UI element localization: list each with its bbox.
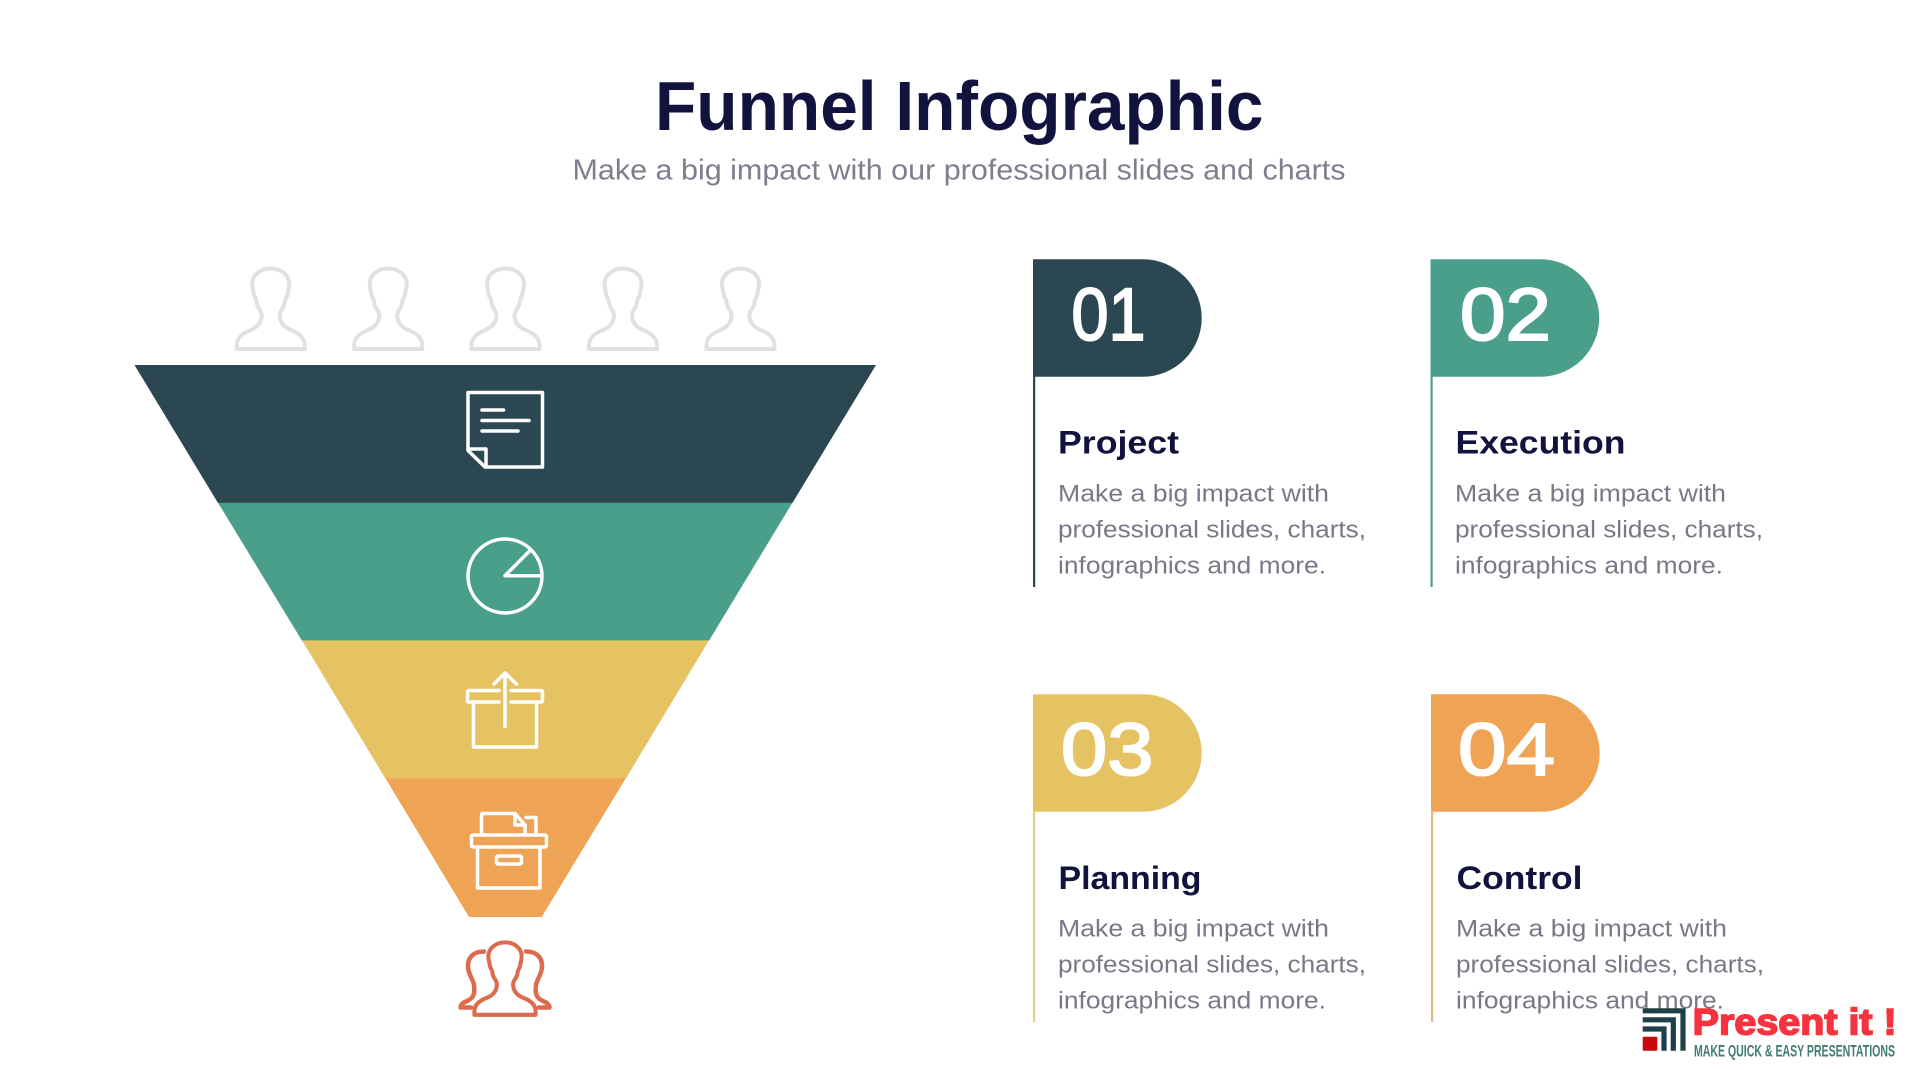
description: Make a big impact with bbox=[1456, 915, 1727, 942]
funnel chart bbox=[134, 365, 876, 917]
description: infographics and more. bbox=[1058, 987, 1326, 1014]
description: professional slides, charts, bbox=[1456, 951, 1764, 978]
description bbox=[1455, 480, 1763, 580]
number 02: 02 bbox=[1460, 273, 1551, 356]
description: Make a big impact with bbox=[1058, 480, 1329, 508]
description: infographics and more. bbox=[1058, 552, 1326, 580]
icon row: five grey people bbox=[237, 268, 774, 349]
icon: pie chart bbox=[468, 539, 542, 613]
panel: 02 Execution bbox=[1430, 259, 1763, 587]
number 03: 03 bbox=[1061, 708, 1154, 791]
accent line bbox=[1431, 811, 1433, 1022]
heading: Control bbox=[1456, 860, 1582, 896]
funnel layer 1 bbox=[134, 365, 876, 503]
number badge 01 bbox=[1033, 259, 1202, 377]
description: infographics and more. bbox=[1456, 987, 1724, 1014]
description bbox=[1058, 915, 1366, 1014]
funnel layer 4 bbox=[386, 778, 626, 917]
logo wordmark: Present it ! bbox=[1693, 1002, 1897, 1042]
title: Funnel Infographic bbox=[655, 67, 1264, 145]
icon: group of people bbox=[460, 942, 550, 1015]
panel: 03 Planning bbox=[1033, 694, 1366, 1022]
number badge 04 bbox=[1431, 694, 1600, 812]
description: professional slides, charts, bbox=[1058, 951, 1366, 978]
description: professional slides, charts, bbox=[1455, 516, 1763, 544]
icon: box with upward arrow bbox=[468, 673, 542, 747]
subtitle: Make a big impact with our professional slides and charts bbox=[572, 154, 1346, 186]
heading: Planning bbox=[1058, 860, 1202, 896]
logo: Present it watermark bbox=[1643, 1002, 1897, 1060]
panel: 01 Project bbox=[1033, 259, 1366, 587]
accent line bbox=[1033, 811, 1035, 1022]
funnel layer 3 bbox=[302, 640, 709, 779]
description bbox=[1456, 915, 1764, 1014]
icon: document bbox=[468, 392, 542, 467]
accent line bbox=[1033, 376, 1035, 587]
icon: archive box with files bbox=[472, 814, 546, 888]
panel: 04 Control bbox=[1431, 694, 1764, 1022]
description: Make a big impact with bbox=[1058, 915, 1329, 942]
icon: logo mark bbox=[1643, 1011, 1683, 1051]
description bbox=[1058, 480, 1366, 580]
number badge 03 bbox=[1033, 694, 1202, 812]
number 04: 04 bbox=[1458, 708, 1555, 791]
description: infographics and more. bbox=[1455, 552, 1723, 580]
accent line bbox=[1430, 376, 1433, 587]
description: Make a big impact with bbox=[1455, 480, 1726, 508]
heading: Project bbox=[1058, 424, 1179, 460]
number 01: 01 bbox=[1072, 273, 1146, 356]
description: professional slides, charts, bbox=[1058, 516, 1366, 544]
heading: Execution bbox=[1456, 424, 1626, 460]
number badge 02 bbox=[1430, 259, 1599, 377]
funnel layer 2 bbox=[218, 503, 792, 641]
